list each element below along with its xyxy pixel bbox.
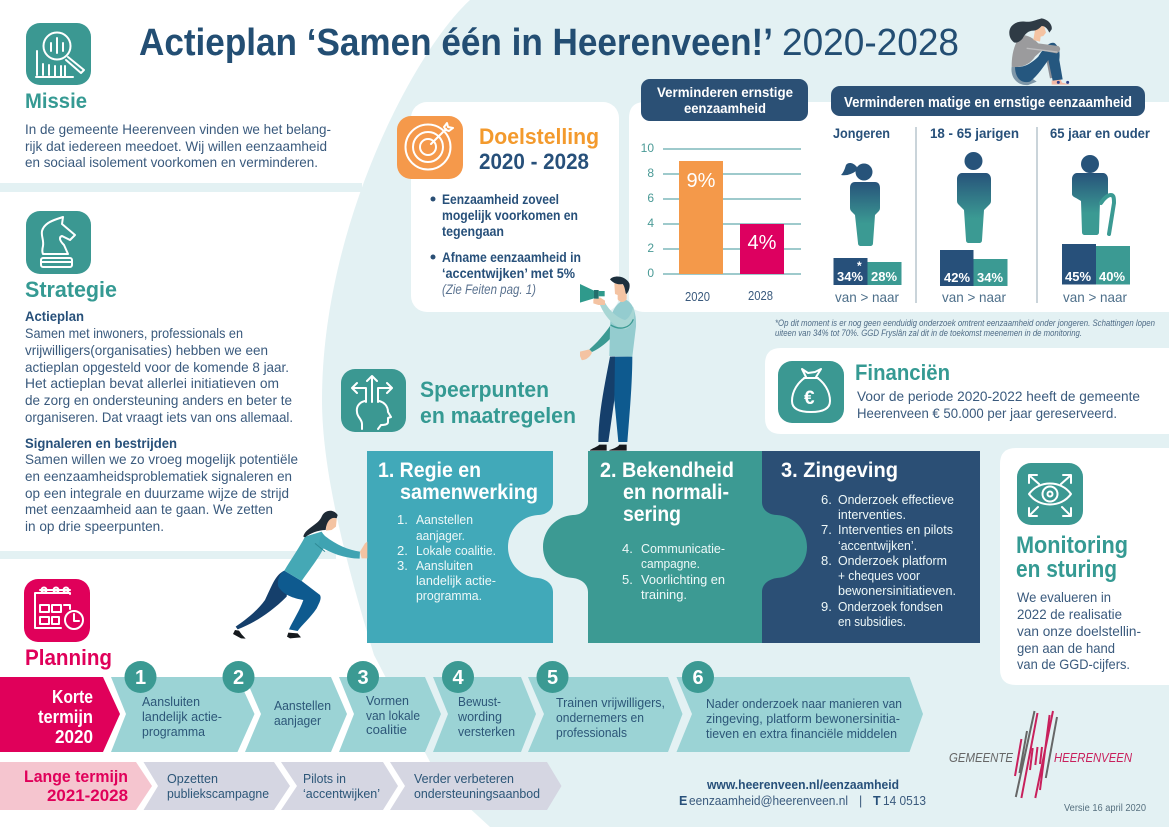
bars xyxy=(940,250,1008,286)
panel: 1 regie en samenwerking xyxy=(367,451,553,643)
step 1: programma xyxy=(142,724,206,739)
column: jongeren xyxy=(833,125,902,305)
numbered list: Onderzoek platform xyxy=(838,553,947,568)
heading: Financiën xyxy=(855,360,950,385)
heading: speerpunten en maatregelen: en maatregelen xyxy=(420,403,576,428)
text block: actieplan: actieplan opgesteld voor de komende 8 jaar. xyxy=(25,359,289,375)
text block xyxy=(857,388,1140,421)
version note: Versie 16 april 2020 xyxy=(1064,803,1146,814)
text block: van onze doelstellin- xyxy=(1017,623,1141,639)
column: 65 jaar en ouder xyxy=(1050,125,1151,305)
numbered list: Aansluiten xyxy=(416,558,473,573)
heading: Missie xyxy=(25,90,87,113)
text block: actieplan: Het actieplan bevat allerlei initiatieven om xyxy=(25,375,279,391)
text block: signaleren: Samen willen we zo vroeg mogelijk potentiële xyxy=(25,451,298,467)
text block: actieplan: organiseren. Dat vraagt iets van ons allemaal. xyxy=(25,409,293,425)
step 6: Nader onderzoek naar manieren van xyxy=(706,696,902,711)
numbered list: training. xyxy=(641,587,687,602)
column: jongeren: Jongeren xyxy=(833,125,890,141)
bars xyxy=(834,258,902,285)
illustration: man with megaphone xyxy=(580,276,636,451)
axis labels: 4 xyxy=(647,216,654,230)
bars: * xyxy=(857,259,862,273)
numbered list: aanjager. xyxy=(416,528,465,543)
bars: 34% xyxy=(837,269,863,284)
text block: actieplan: de zorg en ondersteuning anders en beter te xyxy=(25,392,292,408)
numbered list xyxy=(821,492,956,629)
panel: 1 regie en samenwerking: samenwerking xyxy=(400,481,538,504)
numbered list: Voorlichting en xyxy=(641,572,725,587)
step: ondersteuningsaanbod: Verder verbeteren xyxy=(414,771,514,786)
bullet list: (Zie Feiten pag. 1) xyxy=(442,282,536,297)
step 6: tieven en extra financiële middelen xyxy=(706,726,897,741)
text block: actieplan xyxy=(25,308,293,425)
heading: speerpunten en maatregelen: Speerpunten xyxy=(420,377,549,402)
footnote: uiteen van 34% tot 70%. GGD Fryslân zal dit in de toekomst meenemen in de monitoring. xyxy=(775,328,1082,338)
bar 2028 xyxy=(740,224,784,303)
timeline: lange termijn xyxy=(0,762,562,810)
step 1 xyxy=(111,661,254,752)
step 6: zingeving, platform bewonersinitia- xyxy=(706,711,900,726)
step 1: landelijk actie- xyxy=(142,709,222,724)
panel: doelstelling: 2020 - 2028 xyxy=(479,149,589,174)
text block: rijk dat iedereen meedoet. Wij willen eenzaamheid xyxy=(25,138,327,154)
text block: Heerenveen € 50.000 per jaar gereserveerd. xyxy=(857,405,1117,421)
text block: signaleren: Signaleren en bestrijden xyxy=(25,435,177,451)
text block: signaleren: met eenzaamheid aan te gaan. We zetten xyxy=(25,501,273,517)
numbered list: landelijk actie- xyxy=(416,573,496,588)
panel: 2 bekendheid en normalisering: en normali- xyxy=(623,481,729,504)
numbered list: programma. xyxy=(416,588,482,603)
icon: girl xyxy=(841,163,880,246)
step 3: van lokale xyxy=(366,708,420,723)
text block: actieplan: vrijwilligers(organisaties) hebben we een xyxy=(25,342,268,358)
numbered list: + cheques voor xyxy=(838,568,921,583)
caption: van > naar xyxy=(942,289,1006,305)
axis labels: 10 xyxy=(641,141,654,155)
panel: 3 zingeving xyxy=(762,451,980,643)
icon: elderly with cane xyxy=(1072,155,1114,235)
numbered list: 7. xyxy=(821,522,832,537)
numbered list: 8. xyxy=(821,553,832,568)
text block: signaleren xyxy=(25,435,298,534)
label: lange termijn 2021-2028 xyxy=(0,762,152,810)
panel: 2 bekendheid en normalisering: sering xyxy=(623,503,681,526)
illustration: sitting woman xyxy=(1009,18,1071,85)
bars: 28% xyxy=(871,269,897,284)
step 2: Aanstellen xyxy=(274,698,331,713)
step 2 xyxy=(222,661,347,752)
step 1: Aansluiten xyxy=(142,694,200,709)
step 5: professionals xyxy=(556,725,627,740)
step 3: 3 xyxy=(357,667,369,689)
numbered list: 1. xyxy=(397,512,408,527)
step: ondersteuningsaanbod: ondersteuningsaanbod xyxy=(414,786,540,801)
icon: eye with arrows xyxy=(1017,463,1083,525)
step 4: versterken xyxy=(458,724,515,739)
step 5: 5 xyxy=(547,667,558,689)
numbered list: 2. xyxy=(397,543,408,558)
bullet list: tegengaan xyxy=(442,224,504,239)
chart header xyxy=(641,79,808,121)
bar chart: verminderen ernstige eenzaamheid xyxy=(641,79,808,304)
text block: signaleren: op een integrale en duurzame wijze de strijd xyxy=(25,485,289,501)
icon: head with arrows xyxy=(341,369,406,432)
step 4: 4 xyxy=(452,667,464,689)
bar 2020: 2020 xyxy=(685,290,710,304)
heading: Strategie xyxy=(25,277,117,302)
label: korte termijn 2020 xyxy=(0,677,120,752)
numbered list: Onderzoek fondsen xyxy=(838,599,943,614)
text block: Voor de periode 2020-2022 heeft de gemeente xyxy=(857,388,1140,404)
label: lange termijn 2021-2028: Lange termijn xyxy=(24,767,128,786)
bullet list: Afname eenzaamheid in xyxy=(442,250,581,265)
text block: gen aan de hand xyxy=(1017,640,1115,656)
bar 2020 xyxy=(679,161,723,304)
numbered list xyxy=(622,541,725,602)
caption: van > naar xyxy=(835,289,899,305)
contact details: E xyxy=(679,794,687,808)
numbered list: en subsidies. xyxy=(838,614,906,629)
text block: actieplan: Samen met inwoners, professionals en xyxy=(25,325,243,341)
chart header: eenzaamheid xyxy=(684,101,766,116)
text block: en sociaal isolement voorkomen en verminderen. xyxy=(25,154,318,170)
step 6 xyxy=(676,661,923,752)
step: pilots xyxy=(281,762,398,810)
panel: monitoring en sturing: en sturing xyxy=(1016,556,1117,583)
axis labels: 0 xyxy=(647,266,654,280)
label: korte termijn 2020: 2020 xyxy=(55,727,93,747)
bar 2020: 9% xyxy=(687,170,716,192)
step 6: 6 xyxy=(692,667,704,689)
axis labels: 2 xyxy=(647,241,654,255)
numbered list: ‘accentwijken’. xyxy=(838,538,917,553)
bullet list: mogelijk voorkomen en xyxy=(442,208,578,223)
text block: 2022 de realisatie xyxy=(1017,606,1122,622)
step 3: Vormen xyxy=(366,693,409,708)
step 4: wording xyxy=(457,709,502,724)
background shape xyxy=(322,0,1169,827)
axis labels: 8 xyxy=(647,166,654,180)
heading: 2. Bekendheid xyxy=(600,459,734,482)
numbered list: bewonersinitiatieven. xyxy=(838,583,956,598)
numbered list: campagne. xyxy=(641,556,700,571)
text block: actieplan: Actieplan xyxy=(25,308,84,324)
bars xyxy=(1062,244,1130,284)
timeline: korte termijn xyxy=(0,661,923,752)
axis labels: 6 xyxy=(647,191,654,205)
bullet list xyxy=(430,192,581,297)
panel: planning xyxy=(24,579,112,670)
icon: chart with magnifier xyxy=(26,23,91,85)
axis labels xyxy=(641,141,654,280)
panel: doelstelling xyxy=(397,102,619,312)
title: Actieplan ‘Samen één in Heerenveen!’ xyxy=(139,22,773,64)
panel: missie xyxy=(25,23,331,170)
heading: 3. Zingeving xyxy=(781,459,898,482)
step 4: Bewust- xyxy=(458,694,501,709)
heading: speerpunten en maatregelen xyxy=(341,369,576,432)
numbered list: Aanstellen xyxy=(416,512,473,527)
heading: Planning xyxy=(25,645,112,670)
numbered list: 4. xyxy=(622,541,633,556)
title: 2020-2028 xyxy=(782,22,959,64)
bars: 34% xyxy=(977,270,1003,285)
step: pilots: Pilots in xyxy=(303,771,346,786)
icon: calendar with clock xyxy=(24,579,90,642)
chart header: Verminderen ernstige xyxy=(657,85,793,100)
header: verminderen matige en ernstige eenzaamheid: Verminderen matige en ernstige eenzaamheid xyxy=(844,95,1132,111)
column: 18-65 jarigen: 18 - 65 jarigen xyxy=(930,125,1019,141)
bullet list: Eenzaamheid zoveel xyxy=(442,192,559,207)
step: ondersteuningsaanbod xyxy=(390,762,562,810)
icon: target xyxy=(397,116,463,179)
step 3 xyxy=(339,661,441,752)
bullet list: ‘accentwijken’ met 5% xyxy=(442,266,575,281)
label: lange termijn 2021-2028: 2021-2028 xyxy=(47,786,128,805)
bars: 42% xyxy=(944,270,970,285)
contact details xyxy=(679,778,926,808)
panel: monitoring en sturing xyxy=(1000,448,1169,685)
panel: 2 bekendheid en normalisering xyxy=(543,451,807,643)
logo: gemeente heerenveen xyxy=(949,711,1133,798)
text block: signaleren: en eenzaamheidsproblematiek signaleren en xyxy=(25,468,292,484)
bars: 45% xyxy=(1065,269,1091,284)
icon: chess knight xyxy=(26,211,91,274)
bar 2028: 4% xyxy=(748,232,777,254)
numbered list: Lokale coalitie. xyxy=(416,543,496,558)
icon: adult xyxy=(957,152,991,243)
contact details: eenzaamheid@heerenveen.nl xyxy=(689,794,848,808)
heading: Monitoring xyxy=(1016,532,1128,559)
step: publiekscampagne: publiekscampagne xyxy=(167,786,269,801)
logo: gemeente heerenveen: GEMEENTE xyxy=(949,750,1013,765)
text block xyxy=(25,121,331,170)
step 2: aanjager xyxy=(274,713,322,728)
heading: Doelstelling xyxy=(479,124,599,149)
bar 2028: 2028 xyxy=(748,289,773,303)
step: publiekscampagne: Opzetten xyxy=(167,771,218,786)
numbered list: Onderzoek effectieve xyxy=(838,492,954,507)
step 5 xyxy=(528,661,682,752)
contact details: | xyxy=(859,794,862,808)
text block: signaleren: in op drie speerpunten. xyxy=(25,518,164,534)
icon: money bag xyxy=(778,361,844,423)
numbered list: interventies. xyxy=(838,507,906,522)
text block: We evalueren in xyxy=(1017,589,1111,605)
label: korte termijn 2020: Korte xyxy=(52,687,93,707)
white panel: charts xyxy=(629,102,1169,312)
bars: 40% xyxy=(1099,269,1125,284)
numbered list: 5. xyxy=(622,572,633,587)
text block xyxy=(1017,589,1141,672)
panel: strategie xyxy=(25,211,298,534)
numbered list: Interventies en pilots xyxy=(838,522,953,537)
heading: 1. Regie en xyxy=(378,459,481,482)
text block: In de gemeente Heerenveen vinden we het belang- xyxy=(25,121,331,137)
step 5: ondernemers en xyxy=(556,710,644,725)
numbered list: 3. xyxy=(397,558,408,573)
header: verminderen matige en ernstige eenzaamheid xyxy=(831,86,1145,116)
column: 65 jaar en ouder: 65 jaar en ouder xyxy=(1050,125,1151,141)
text block: van de GGD-cijfers. xyxy=(1017,656,1130,672)
illustration: pushing woman xyxy=(233,511,367,639)
step 4 xyxy=(433,661,536,752)
step: publiekscampagne xyxy=(144,762,290,810)
icon: money bag: € xyxy=(804,388,815,409)
step 1: 1 xyxy=(135,667,146,689)
footnote xyxy=(775,318,1155,338)
numbered list: 9. xyxy=(821,599,832,614)
logo: gemeente heerenveen: HEERENVEEN xyxy=(1054,750,1133,765)
contact details: www.heerenveen.nl/eenzaamheid xyxy=(706,778,899,792)
numbered list xyxy=(397,512,496,603)
step 5: Trainen vrijwilligers, xyxy=(556,695,665,710)
panel: financiën xyxy=(765,348,1169,434)
column: 18-65 jarigen xyxy=(930,125,1019,305)
label: korte termijn 2020: termijn xyxy=(38,707,93,727)
contact details: T xyxy=(873,794,881,808)
step: pilots: ‘accentwijken’ xyxy=(303,786,380,801)
numbered list: 6. xyxy=(821,492,832,507)
numbered list: Communicatie- xyxy=(641,541,725,556)
step 2: 2 xyxy=(233,667,244,689)
contact details: 14 0513 xyxy=(883,794,926,808)
step 3: coalitie xyxy=(366,722,407,737)
caption: van > naar xyxy=(1063,289,1127,305)
